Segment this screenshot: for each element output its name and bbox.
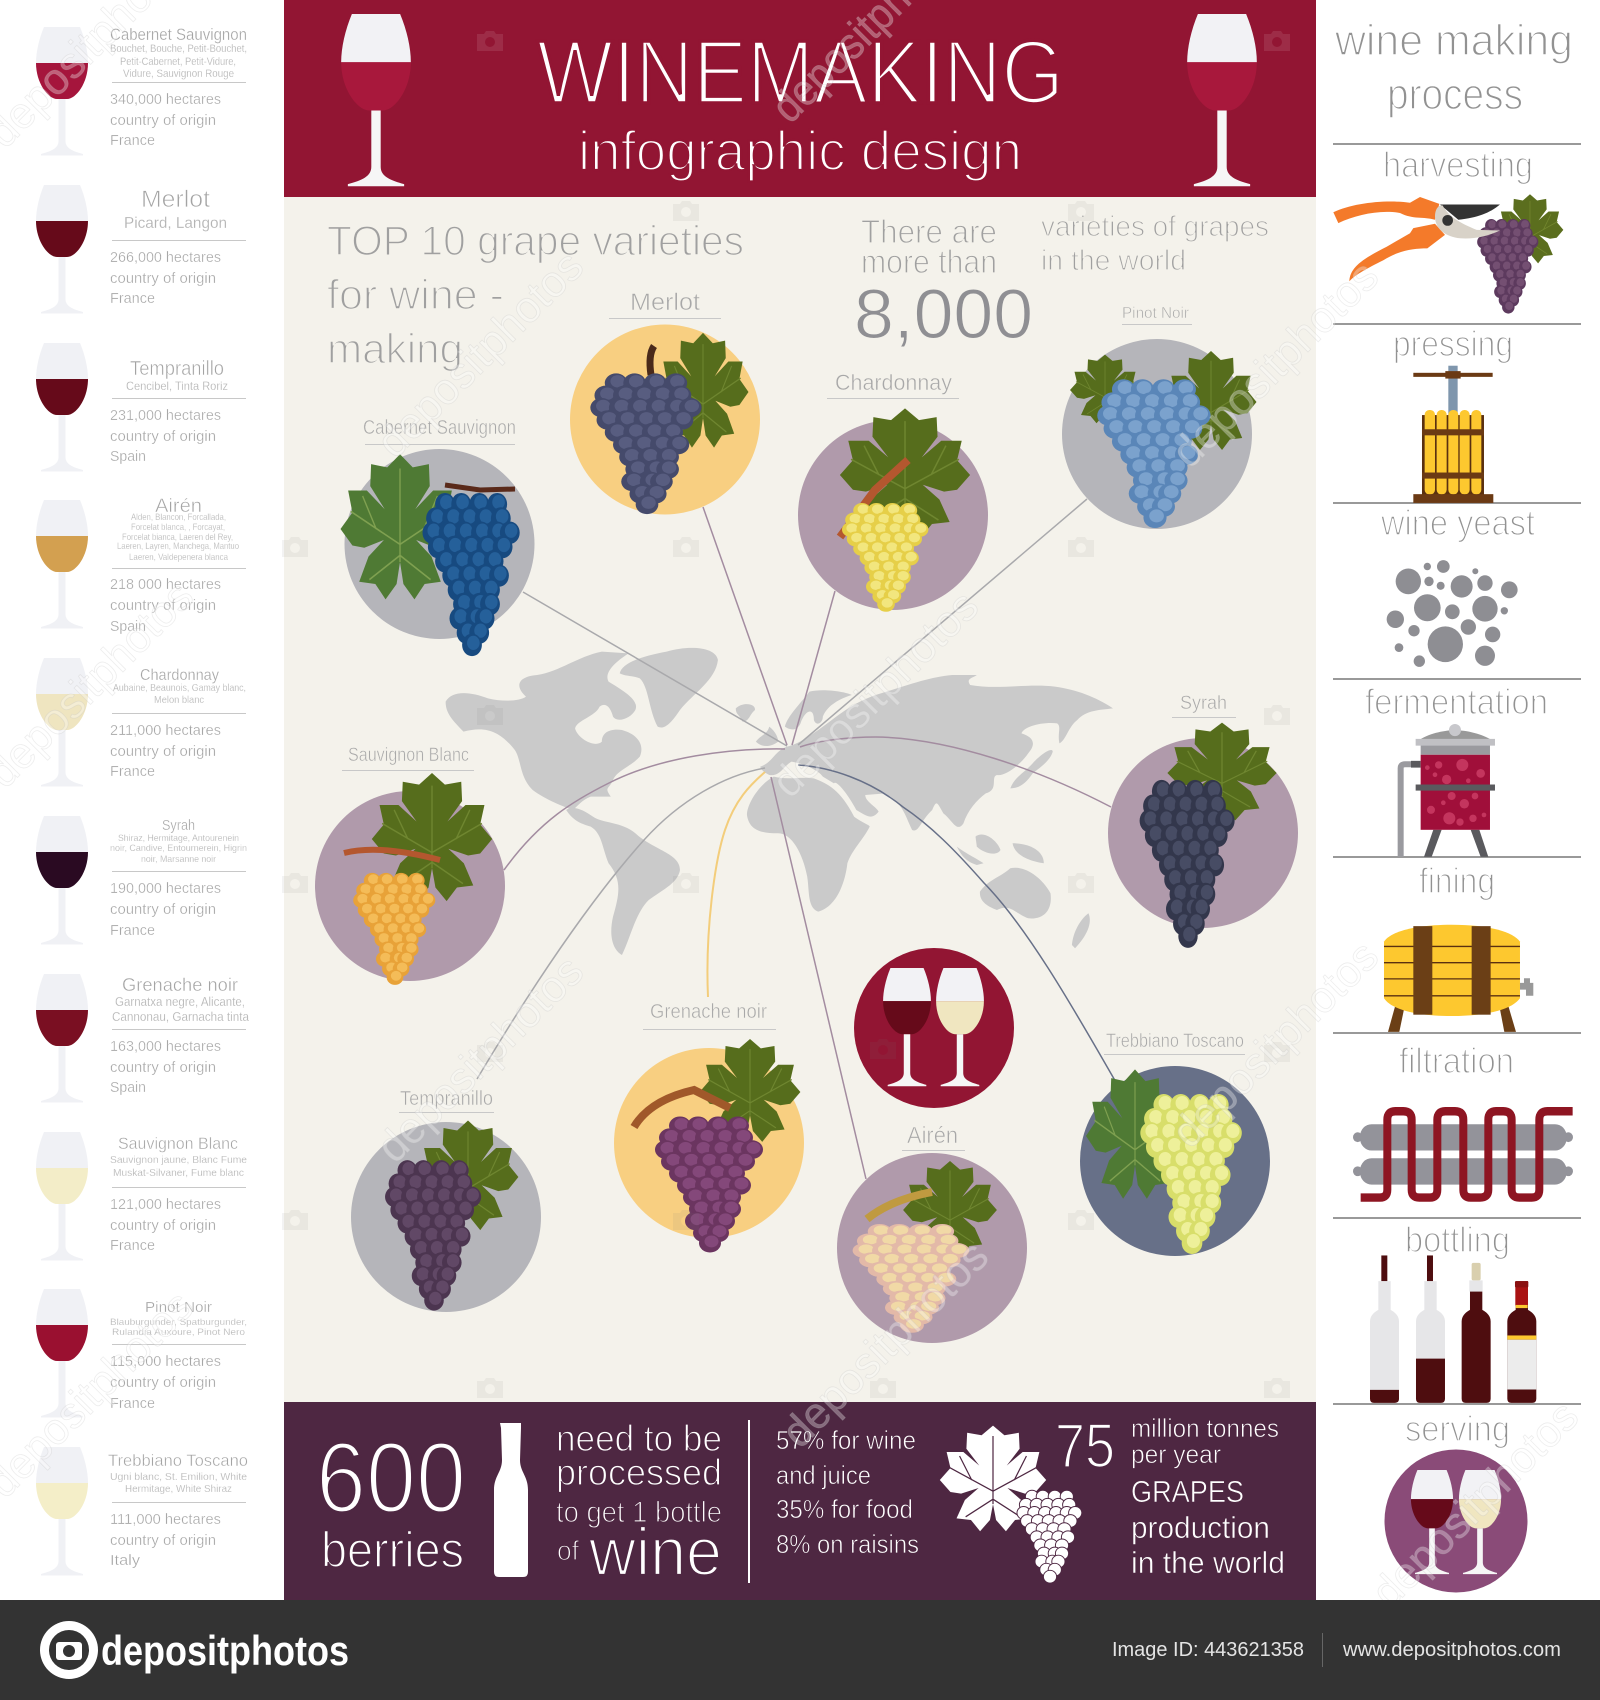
- grape: Merlot: Merlot: [630, 289, 700, 316]
- variety: Pinot Noir: [36, 1289, 247, 1418]
- grape: Tempranillo: Tempranillo: [400, 1088, 493, 1110]
- variety: Grenache noir: Cannonau, Garnacha tinta: [112, 1010, 249, 1024]
- grape: Pinot Noir: [1062, 305, 1256, 529]
- variety: Grenache noir: Spain: [110, 1079, 146, 1096]
- grape: Trebbiano Toscano: [1080, 1031, 1270, 1256]
- variety: Merlot: Picard, Langon: [124, 215, 227, 232]
- heading: wine making process: wine making: [1334, 16, 1573, 65]
- text: 75 million tonnes: million tonnes: [1131, 1413, 1279, 1443]
- step: serving: serving: [1405, 1408, 1510, 1449]
- variety: Chardonnay: Melon blanc: [154, 694, 204, 706]
- variety: Tempranillo: [36, 343, 246, 472]
- variety: Merlot: [36, 185, 246, 314]
- text: grape use shares: [776, 1425, 919, 1559]
- text: grape use shares: 8% on raisins: [776, 1529, 919, 1559]
- variety: Airén: [36, 496, 246, 635]
- text: need to be processed: wine: [588, 1514, 722, 1590]
- variety: Chardonnay: country of origin: [110, 743, 216, 760]
- icon: filter pipes: [1353, 1111, 1573, 1198]
- variety: Cabernet Sauvignon: Bouchet, Bouche, Petit-Bouchet,: [110, 43, 247, 55]
- text: depositphotos: [762, 582, 988, 807]
- variety: Syrah: country of origin: [110, 901, 216, 918]
- variety: Trebbiano Toscano: Hermitage, White Shiraz: [125, 1483, 232, 1495]
- variety: Airén: 218 000 hectares: [110, 576, 221, 593]
- stat: 8,000 varieties of grapes: There are: [861, 213, 997, 250]
- text: grape use shares: 35% for food: [776, 1494, 913, 1524]
- text: need to be processed: [556, 1418, 722, 1590]
- variety: Pinot Noir: 115,000 hectares: [110, 1353, 221, 1370]
- variety: Syrah: [36, 816, 247, 944]
- variety: Airén: Laeren, Valdepenera blanca: [129, 552, 229, 563]
- step: filtration: [1353, 1040, 1573, 1198]
- variety: Pinot Noir: Rulandia Auxoure, Pinot Nero: [112, 1327, 245, 1338]
- variety: Syrah: France: [110, 922, 155, 939]
- variety: Grenache noir: Grenache noir: [122, 975, 238, 995]
- stat: 8,000 varieties of grapes: more than: [861, 243, 997, 280]
- text: 75 million tonnes: production: [1131, 1510, 1270, 1545]
- step: bottling: [1370, 1219, 1536, 1403]
- grape: Grenache noir: Grenache noir: [650, 1001, 767, 1023]
- icon: wine bottles: [1370, 1255, 1536, 1403]
- variety: Sauvignon Blanc: country of origin: [110, 1217, 216, 1234]
- panel: grape varieties list: [36, 25, 249, 1576]
- panel: bottom statistics: [284, 1402, 1316, 1600]
- variety: Cabernet Sauvignon: Petit-Cabernet, Petit-Vidure,: [120, 56, 236, 68]
- title: WINEMAKING: [537, 23, 1064, 123]
- grape: Sauvignon Blanc: Sauvignon Blanc: [348, 745, 469, 766]
- variety: Airén: Alden, Blancon, Forcallada,: [131, 512, 226, 523]
- heading: wine making process: process: [1387, 70, 1523, 119]
- step: filtration: filtration: [1399, 1040, 1514, 1081]
- variety: Pinot Noir: Blauburgunder, Spatburgunder,: [110, 1317, 247, 1328]
- grape: Cabernet Sauvignon: Cabernet Sauvignon: [363, 417, 516, 439]
- variety: Grenache noir: Garnatxa negre, Alicante,: [115, 995, 245, 1009]
- step: pressing: [1393, 323, 1513, 503]
- text: 75 million tonnes: [1055, 1412, 1285, 1580]
- variety: Syrah: noir, Marsanne noir: [141, 854, 216, 865]
- step: pressing: pressing: [1393, 323, 1513, 364]
- grape: Cabernet Sauvignon: [340, 417, 534, 656]
- variety: Pinot Noir: Pinot Noir: [145, 1299, 212, 1316]
- panel: grape varieties map: [284, 197, 1316, 1402]
- variety: Sauvignon Blanc: 121,000 hectares: [110, 1196, 221, 1213]
- text: need to be processed: to get 1 bottle: [556, 1496, 722, 1529]
- variety: Trebbiano Toscano: Ugni blanc, St. Emilion, White: [110, 1471, 247, 1483]
- icon: right wine glass: [1187, 14, 1257, 186]
- heading: top 10 grape varieties: TOP 10 grape varieties: [327, 217, 744, 264]
- variety: Sauvignon Blanc: [36, 1132, 247, 1260]
- grape: Airén: Airén: [907, 1122, 958, 1148]
- stat: 8,000 varieties of grapes: varieties of grapes: [1041, 211, 1269, 243]
- variety: Chardonnay: France: [110, 763, 155, 780]
- step: fining: fining: [1419, 860, 1495, 901]
- icon: left wine glass: [341, 14, 411, 186]
- text: depositphotos: [1362, 1392, 1588, 1617]
- text: depositphotos: [367, 947, 593, 1172]
- variety: Airén: country of origin: [110, 597, 216, 614]
- variety: Syrah: noir, Candive, Entournerein, Higrin: [110, 843, 247, 854]
- text: depositphotos: [367, 242, 593, 467]
- icon: fermentation tank: [1401, 724, 1495, 857]
- variety: Sauvignon Blanc: France: [110, 1237, 155, 1254]
- icon: barrel: [1384, 925, 1533, 1032]
- step: fermentation: fermentation: [1365, 681, 1548, 722]
- variety: Syrah: Syrah: [162, 817, 195, 834]
- heading: top 10 grape varieties: for wine -: [327, 271, 504, 318]
- step: fermentation: [1365, 681, 1548, 857]
- grape: Tempranillo: [351, 1088, 541, 1312]
- variety: Trebbiano Toscano: country of origin: [110, 1532, 216, 1549]
- variety: Tempranillo: Tempranillo: [130, 358, 224, 380]
- text: 75 million tonnes: GRAPES: [1131, 1474, 1244, 1509]
- stat: 600 berries: [316, 1422, 466, 1578]
- icon: red and white wine glasses: [854, 948, 1014, 1108]
- world map: [446, 648, 1113, 955]
- step: harvesting: harvesting: [1383, 144, 1533, 185]
- text: grape use shares: and juice: [776, 1460, 871, 1490]
- step: wine yeast: wine yeast: [1380, 502, 1535, 543]
- variety: Chardonnay: Aubaine, Beaunois, Gamay blanc,: [113, 682, 246, 694]
- variety: Sauvignon Blanc: Muskat-Silvaner, Fume blanc: [113, 1167, 244, 1179]
- icon: wine press: [1413, 366, 1493, 503]
- icon: white bottle: [494, 1423, 528, 1577]
- variety: Cabernet Sauvignon: Vidure, Sauvignon Rouge: [123, 68, 234, 80]
- variety: Airén: Spain: [110, 618, 146, 635]
- step: serving: [1384, 1408, 1528, 1592]
- text: 75 million tonnes: in the world: [1131, 1545, 1285, 1580]
- step: harvesting: [1333, 144, 1563, 314]
- grape: Syrah: [1108, 693, 1298, 948]
- variety: Merlot: Merlot: [141, 186, 210, 213]
- text: 75 million tonnes: 75: [1055, 1412, 1115, 1481]
- text: depositphotos: [1162, 252, 1388, 477]
- stat: 8,000 varieties of grapes: [854, 211, 1269, 353]
- panel: header banner: [284, 0, 1316, 197]
- stat: 600 berries: berries: [321, 1522, 464, 1578]
- grape: Merlot: [570, 289, 760, 514]
- stat: 600 berries: 600: [316, 1422, 466, 1534]
- text: depositphotos: [772, 1232, 998, 1457]
- heading: top 10 grape varieties: making: [327, 325, 463, 372]
- stat: 8,000 varieties of grapes: 8,000: [854, 275, 1033, 353]
- logo: depositphotos: [40, 1621, 349, 1679]
- logo: depositphotos: depositphotos: [101, 1627, 349, 1674]
- subtitle: infographic design: [578, 119, 1022, 182]
- variety: Merlot: country of origin: [110, 270, 216, 287]
- step: fining: [1384, 860, 1533, 1032]
- variety: Grenache noir: [36, 974, 249, 1102]
- variety: Tempranillo: Cencibel, Tinta Roriz: [126, 379, 228, 393]
- website: www.depositphotos.com: [1342, 1639, 1561, 1661]
- variety: Cabernet Sauvignon: [36, 25, 247, 156]
- variety: Airén: Airén: [155, 496, 202, 517]
- grape: Grenache noir: [614, 1001, 804, 1252]
- variety: Syrah: 190,000 hectares: [110, 880, 221, 897]
- variety: Cabernet Sauvignon: 340,000 hectares: [110, 91, 221, 108]
- variety: Merlot: France: [110, 290, 155, 307]
- icon: white leaf and grapes: [940, 1426, 1082, 1583]
- variety: Cabernet Sauvignon: Cabernet Sauvignon: [110, 25, 247, 44]
- grape: Pinot Noir: Pinot Noir: [1122, 305, 1190, 322]
- stat: 8,000 varieties of grapes: in the world: [1041, 245, 1186, 277]
- connector lines to map: [477, 499, 1117, 1179]
- variety: Tempranillo: country of origin: [110, 428, 216, 445]
- grape: Sauvignon Blanc: [315, 745, 505, 985]
- variety: Airén: Forcelat bianca, Laeren del Rey,: [122, 532, 233, 543]
- variety: Airén: Forcelat blanca, , Forcayat,: [131, 522, 225, 533]
- variety: Tempranillo: Spain: [110, 448, 146, 465]
- grape: Airén: [837, 1122, 1027, 1343]
- variety: Cabernet Sauvignon: France: [110, 132, 155, 149]
- variety: Chardonnay: 211,000 hectares: [110, 722, 221, 739]
- footer bar: [0, 1600, 1600, 1700]
- grape: Chardonnay: Chardonnay: [835, 370, 952, 395]
- variety: Sauvignon Blanc: Sauvignon Blanc: [118, 1134, 238, 1153]
- text: depositphotos: [1162, 932, 1388, 1157]
- icon: serving glasses: [1384, 1450, 1528, 1592]
- panel: wine making process: [1333, 16, 1581, 1592]
- variety: Merlot: 266,000 hectares: [110, 249, 221, 266]
- variety: Grenache noir: 163,000 hectares: [110, 1038, 221, 1055]
- icon: yeast cells: [1387, 560, 1518, 667]
- variety: Chardonnay: [36, 658, 246, 786]
- variety: Cabernet Sauvignon: country of origin: [110, 112, 216, 129]
- variety: Chardonnay: Chardonnay: [140, 667, 219, 684]
- variety: Trebbiano Toscano: [36, 1447, 248, 1576]
- grape: Syrah: Syrah: [1180, 693, 1227, 714]
- heading: top 10 grape varieties: [327, 217, 744, 372]
- step: bottling: bottling: [1405, 1219, 1510, 1260]
- icon: pruning shears and grapes: [1333, 194, 1563, 314]
- image id: Image ID: 443621358: [1112, 1639, 1304, 1661]
- text: need to be processed: processed: [556, 1452, 722, 1493]
- variety: Sauvignon Blanc: Sauvignon jaune, Blanc Fume: [110, 1154, 247, 1166]
- variety: Grenache noir: country of origin: [110, 1059, 216, 1076]
- grape: Trebbiano Toscano: Trebbiano Toscano: [1106, 1031, 1244, 1052]
- grape: Chardonnay: [798, 370, 988, 612]
- variety: Tempranillo: 231,000 hectares: [110, 407, 221, 424]
- variety: Airén: Laeren, Layren, Manchega, Mantuo: [117, 541, 239, 552]
- variety: Trebbiano Toscano: 111,000 hectares: [110, 1511, 221, 1528]
- variety: Pinot Noir: country of origin: [110, 1374, 216, 1391]
- variety: Trebbiano Toscano: Trebbiano Toscano: [108, 1451, 248, 1470]
- step: wine yeast: [1380, 502, 1535, 667]
- heading: wine making process: [1334, 16, 1573, 119]
- variety: Pinot Noir: France: [110, 1395, 155, 1412]
- text: grape use shares: 57% for wine: [776, 1425, 916, 1455]
- text: 75 million tonnes: per year: [1131, 1439, 1221, 1469]
- text: need to be processed: of: [557, 1535, 579, 1566]
- variety: Trebbiano Toscano: Italy: [110, 1552, 141, 1569]
- text: need to be processed: need to be: [556, 1418, 722, 1459]
- variety: Syrah: Shiraz, Hermitage, Antourenein: [118, 833, 239, 844]
